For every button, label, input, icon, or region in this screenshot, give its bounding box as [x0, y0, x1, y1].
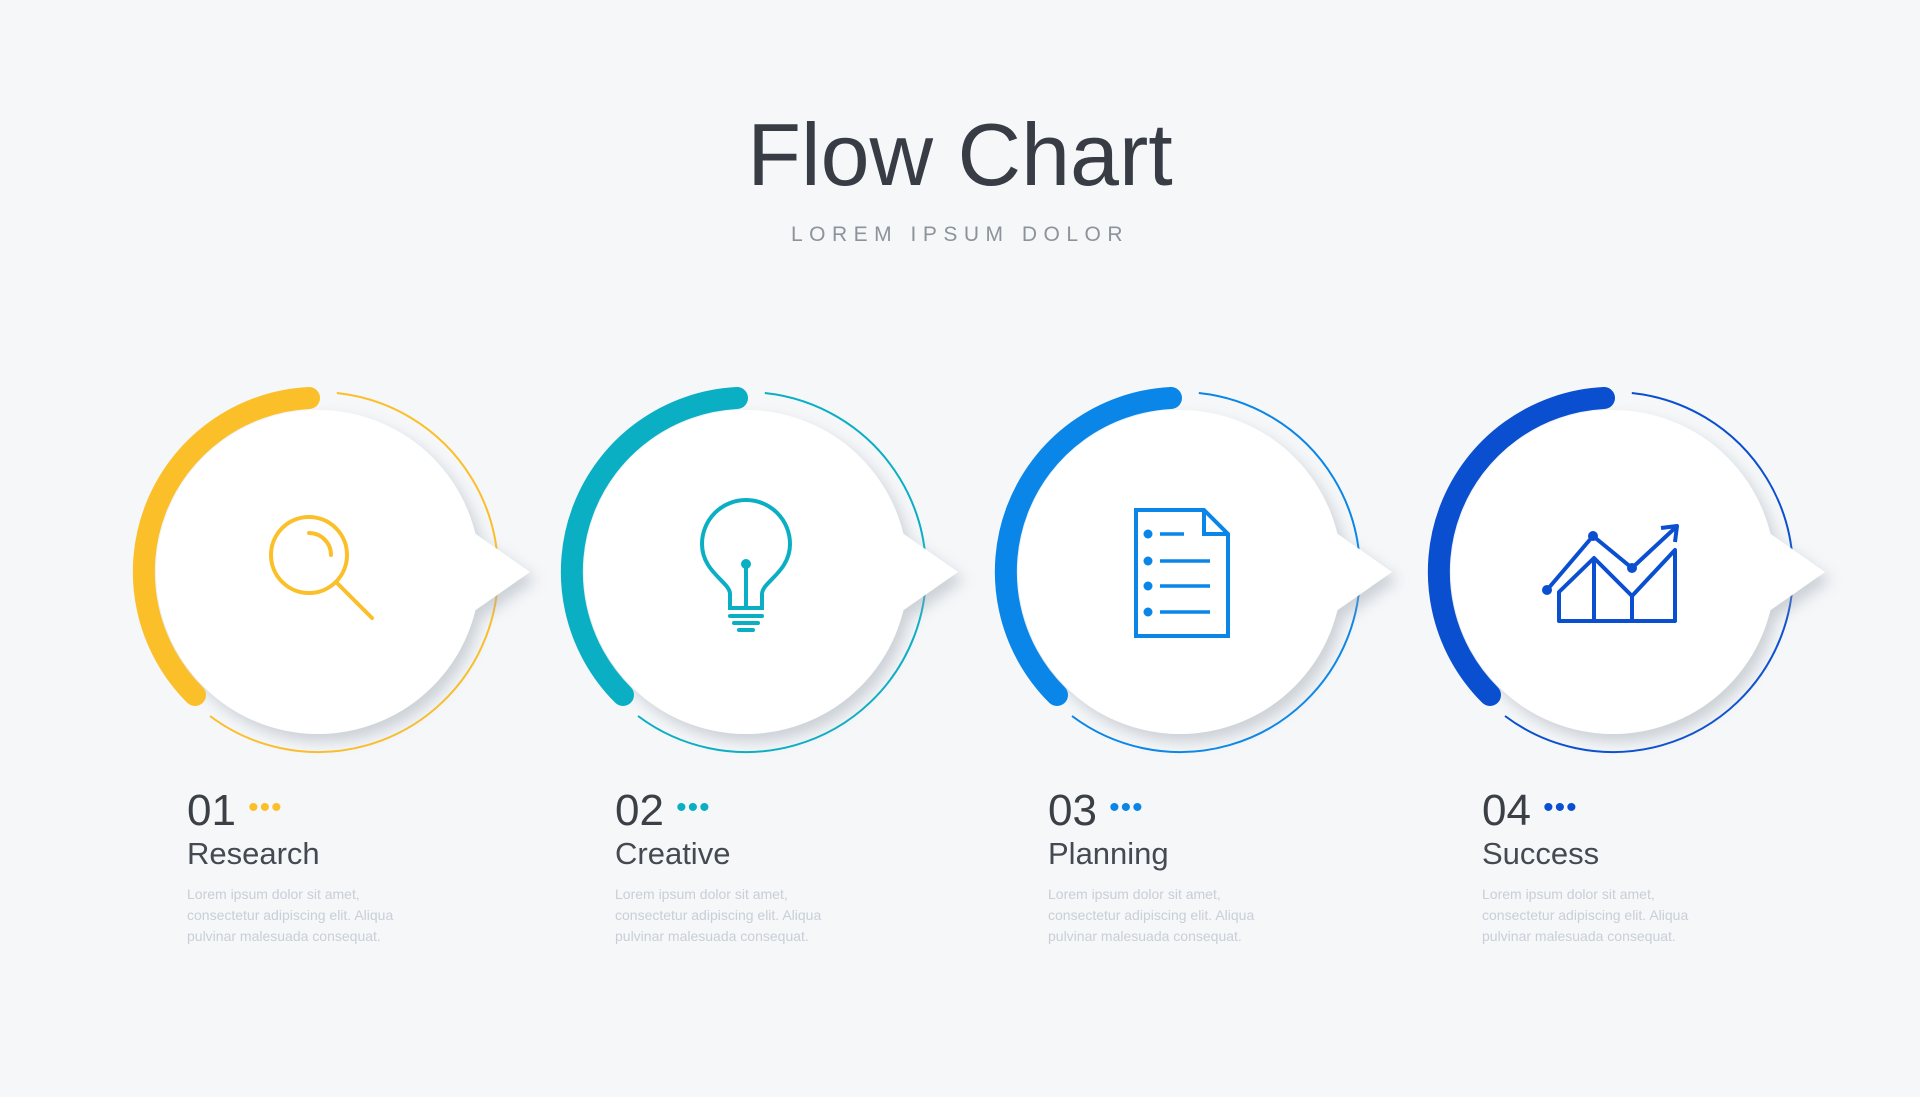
step 3 text: Planning [1048, 836, 1169, 871]
step 1 circle [144, 393, 530, 752]
step 4 text: Lorem ipsum dolor sit amet, [1482, 886, 1655, 902]
step 1 text: pulvinar malesuada consequat. [187, 928, 381, 944]
icon: document [1136, 510, 1228, 636]
step 3 text [1048, 786, 1254, 944]
step 3 text: 03 ••• [1048, 786, 1144, 835]
step 1 text: 01 ••• [187, 786, 283, 835]
step 2 circle [572, 393, 958, 752]
step 4 text: consectetur adipiscing elit. Aliqua [1482, 907, 1688, 923]
step 4 circle [1439, 393, 1825, 752]
step 4 text [1482, 786, 1688, 944]
icon: bulb [702, 500, 790, 630]
step 1 text: Lorem ipsum dolor sit amet, [187, 886, 360, 902]
step 1 text: consectetur adipiscing elit. Aliqua [187, 907, 393, 923]
step 4 text: pulvinar malesuada consequat. [1482, 928, 1676, 944]
title: Flow Chart [747, 105, 1173, 204]
step 2 text: Lorem ipsum dolor sit amet, [615, 886, 788, 902]
step 2 text: 02 ••• [615, 786, 711, 835]
subtitle: LOREM IPSUM DOLOR [791, 223, 1129, 246]
step 3 text: Lorem ipsum dolor sit amet, [1048, 886, 1221, 902]
icon: growth chart [1542, 526, 1677, 621]
step 1 text [187, 786, 394, 944]
step 2 text: consectetur adipiscing elit. Aliqua [615, 907, 821, 923]
icon: magnifier [271, 517, 372, 618]
step 1 text: Research [187, 836, 320, 871]
step 2 text: Creative [615, 836, 730, 871]
step 4 text: 04 ••• [1482, 786, 1578, 835]
step 2 text [615, 786, 822, 944]
step 2 text: pulvinar malesuada consequat. [615, 928, 809, 944]
step 3 text: pulvinar malesuada consequat. [1048, 928, 1242, 944]
step 3 circle [1006, 393, 1392, 752]
step 3 text: consectetur adipiscing elit. Aliqua [1048, 907, 1254, 923]
step 4 text: Success [1482, 836, 1599, 871]
